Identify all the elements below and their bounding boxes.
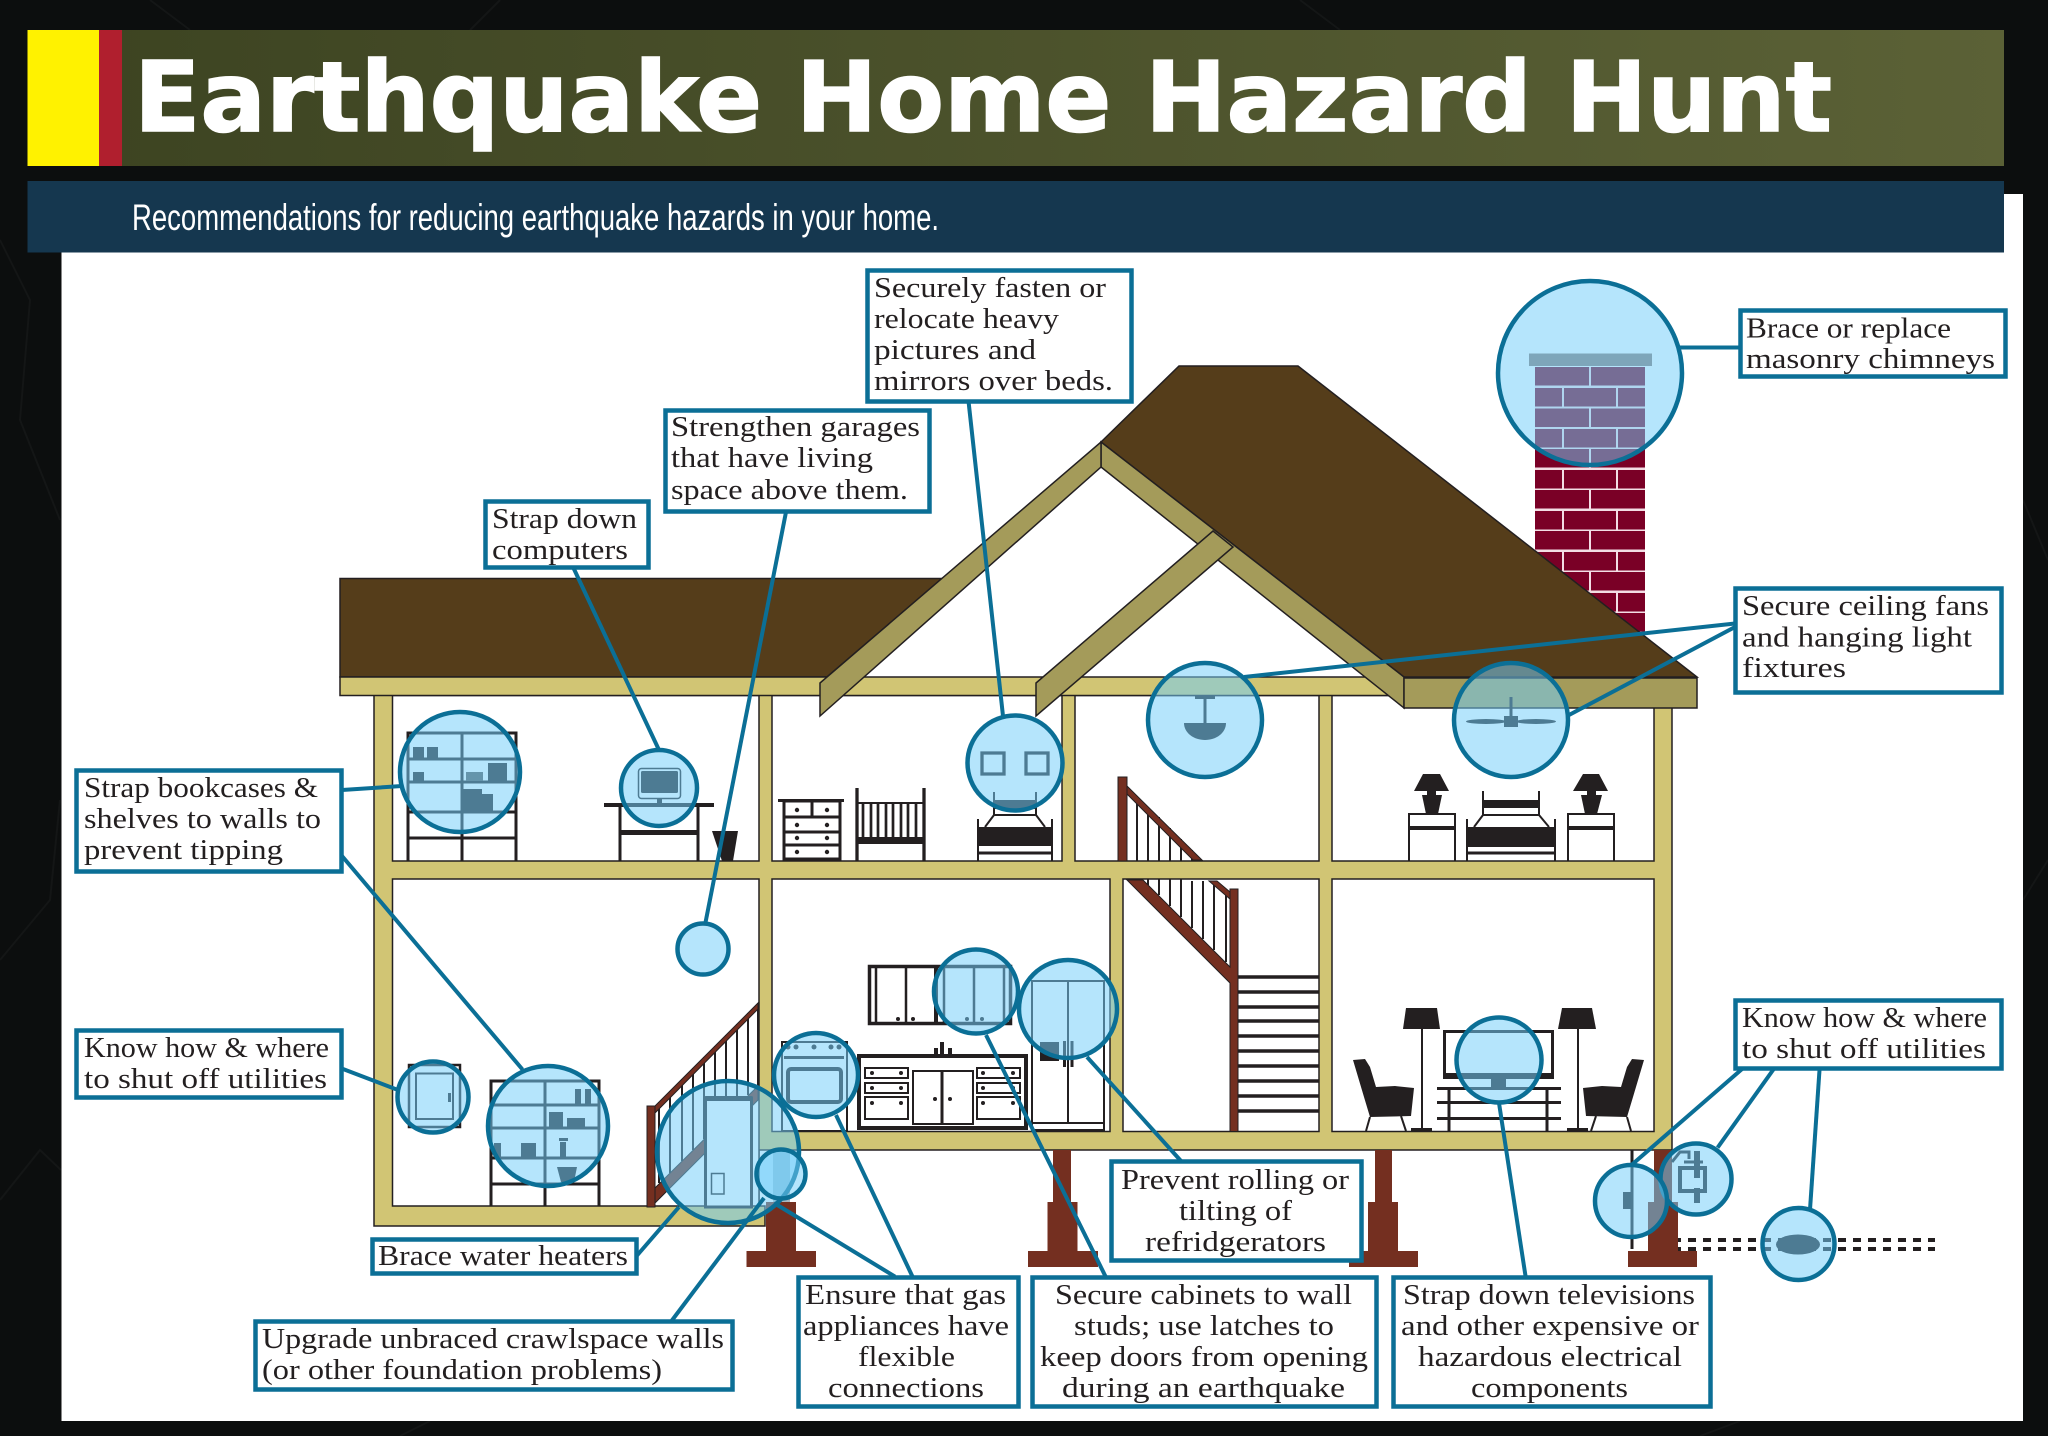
house structure — [340, 366, 1697, 1226]
callout: chimneys: masonry chimneys — [1746, 344, 1995, 375]
callout: water heaters: Brace water heaters — [378, 1241, 628, 1272]
table lamps — [1414, 774, 1449, 814]
wall and floor framing — [374, 690, 1672, 1226]
callout: utilities left: Know how & where — [84, 1033, 329, 1064]
furniture: upper bookcase — [408, 733, 516, 861]
wall pictures — [982, 753, 1048, 774]
callout: cabinets: Secure cabinets to wall — [1055, 1280, 1352, 1311]
magnifier lenses — [398, 281, 1834, 1280]
callout: gas appliances — [798, 1278, 1018, 1406]
callout: strengthen garages: that have living — [671, 443, 873, 474]
callout: chimneys: Brace or replace — [1746, 314, 1951, 344]
utility panel, lower left — [409, 1065, 460, 1127]
living room: television and console — [1437, 1032, 1561, 1131]
callout: televisions: and other expensive or — [1401, 1311, 1700, 1342]
callout: gas appliances: Ensure that gas — [805, 1280, 1006, 1311]
furniture: wastebasket — [712, 831, 738, 861]
callout: utilities right: to shut off utilities — [1742, 1034, 1986, 1065]
title banner — [28, 30, 2004, 166]
callout: ceiling fans — [1736, 588, 2002, 692]
callout: refrigerators: tilting of — [1179, 1196, 1293, 1227]
callout: televisions — [1394, 1278, 1710, 1406]
living room: floor lamps — [1403, 1008, 1596, 1131]
utility meters and pipes — [1623, 1150, 1935, 1254]
callout: televisions: hazardous electrical — [1418, 1342, 1682, 1373]
lower bookcase — [491, 1081, 599, 1206]
living room: armchairs — [1353, 1059, 1644, 1131]
callout: televisions: components — [1471, 1373, 1628, 1404]
callout: utilities left — [76, 1030, 342, 1098]
chimney — [1529, 354, 1652, 632]
furniture: desk and computer — [604, 768, 714, 861]
callout: ceiling fans: and hanging light — [1742, 622, 1972, 654]
nightstands — [1409, 814, 1614, 861]
furniture: dresser — [778, 799, 844, 861]
callout: utilities right — [1736, 1000, 2002, 1068]
callout: strap down computers: Strap down — [492, 504, 637, 535]
callout: strap down computers: computers — [492, 535, 628, 566]
callout: strap bookcases: Strap bookcases & — [84, 773, 318, 804]
callout: cabinets — [1032, 1278, 1376, 1406]
ceiling fascia — [340, 677, 1400, 696]
subtitle banner — [28, 181, 2004, 252]
callout: fasten pictures and mirrors: pictures and — [874, 335, 1036, 366]
foundation piers — [746, 1150, 1697, 1267]
ceiling fan — [1466, 697, 1556, 727]
callout: ceiling fans: fixtures — [1742, 653, 1846, 684]
room interiors — [392, 696, 1654, 1206]
title: Earthquake Home Hazard Hunt — [134, 41, 1832, 154]
callout: fasten pictures and mirrors: mirrors over beds. — [874, 366, 1113, 397]
callout: utilities left: to shut off utilities — [84, 1064, 327, 1095]
refrigerator — [1032, 981, 1104, 1130]
callout: chimneys — [1740, 310, 2006, 376]
callout: strap bookcases: shelves to walls to — [84, 804, 321, 835]
callout: televisions: Strap down televisions — [1403, 1280, 1695, 1311]
callout: strap bookcases — [76, 770, 342, 872]
callout: fasten pictures and mirrors: Securely fasten or — [874, 273, 1107, 304]
callout: strap down computers — [486, 502, 648, 568]
callout: gas appliances: connections — [828, 1373, 984, 1404]
kitchen base cabinets — [859, 1042, 1026, 1128]
hanging light fixture — [1184, 695, 1226, 740]
callout: crawlspace: (or other foundation problems) — [262, 1355, 662, 1386]
callout: refrigerators: Prevent rolling or — [1121, 1165, 1350, 1196]
lower left staircase — [647, 1003, 758, 1207]
callout: refrigerators: refridgerators — [1145, 1227, 1326, 1258]
furniture: bed under pictures — [978, 753, 1052, 861]
callout: fasten pictures and mirrors — [868, 270, 1132, 402]
callout: ceiling fans: Secure ceiling fans — [1742, 591, 1989, 622]
stair treads — [1238, 977, 1319, 1111]
callout: cabinets: studs; use latches to — [1074, 1311, 1334, 1342]
kitchen wall cabinets — [870, 966, 1010, 1024]
callout: refrigerators — [1112, 1162, 1362, 1260]
subtitle: Recommendations for reducing earthquake hazards in your home. — [132, 197, 939, 238]
crawlspace wall stem — [773, 1150, 790, 1202]
callout: cabinets: during an earthquake — [1062, 1373, 1345, 1404]
roof rafters — [820, 442, 1697, 716]
main gable roof — [1101, 366, 1697, 677]
furniture: crib — [857, 788, 925, 861]
callout: gas appliances: appliances have — [803, 1311, 1009, 1342]
left roof — [340, 578, 942, 677]
callout: strengthen garages: Strengthen garages — [671, 412, 920, 443]
callout: strap bookcases: prevent tipping — [84, 835, 283, 866]
callout: crawlspace: Upgrade unbraced crawlspace walls — [262, 1324, 724, 1355]
callout: cabinets: keep doors from opening — [1040, 1342, 1368, 1373]
callout: strengthen garages — [666, 410, 930, 512]
callout: gas appliances: flexible — [858, 1342, 955, 1373]
callout: utilities right: Know how & where — [1742, 1003, 1987, 1034]
callout: fasten pictures and mirrors: relocate heavy — [874, 304, 1059, 335]
leader lines — [342, 348, 1820, 1321]
callout: strengthen garages: space above them. — [671, 475, 908, 506]
central staircase — [1118, 777, 1319, 1132]
stove — [782, 1042, 847, 1131]
water heater — [704, 1096, 753, 1207]
furniture: main bedroom set — [1409, 774, 1614, 861]
callout: crawlspace — [256, 1322, 732, 1390]
